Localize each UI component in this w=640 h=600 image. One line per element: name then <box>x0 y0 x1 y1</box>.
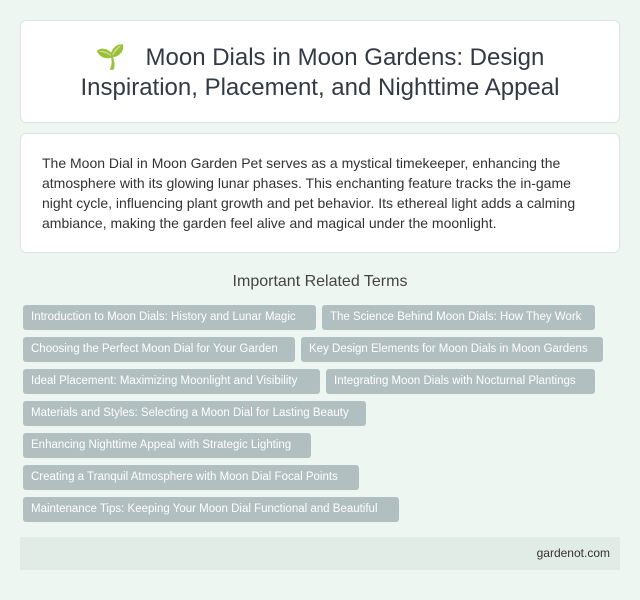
tag 3: Choosing the Perfect Moon Dial for Your Garden <box>31 343 278 355</box>
footer <box>20 537 620 570</box>
tag 8: Enhancing Nighttime Appeal with Strategic Lighting <box>31 439 291 451</box>
tag 6: Integrating Moon Dials with Nocturnal Plantings <box>334 375 576 387</box>
tag 7 <box>23 401 366 426</box>
tag 3 <box>23 337 295 362</box>
tag 4: Key Design Elements for Moon Dials in Moon Gardens <box>309 343 588 355</box>
title <box>81 44 559 101</box>
tag 9 <box>23 465 359 490</box>
title: 🌱 Moon Dials in Moon Gardens: Design <box>96 44 544 71</box>
title card <box>20 20 620 123</box>
tag 7: Materials and Styles: Selecting a Moon Dial for Lasting Beauty <box>31 407 349 419</box>
tag 6 <box>326 369 595 394</box>
tag 9: Creating a Tranquil Atmosphere with Moon Dial Focal Points <box>31 471 338 483</box>
tag 2: The Science Behind Moon Dials: How They Work <box>330 311 581 323</box>
section heading: Important Related Terms <box>233 273 407 290</box>
title: Inspiration, Placement, and Nighttime Appeal <box>81 74 559 101</box>
tag 10: Maintenance Tips: Keeping Your Moon Dial Functional and Beautiful <box>31 503 378 515</box>
tag 1: Introduction to Moon Dials: History and Lunar Magic <box>31 311 296 323</box>
tag 4 <box>301 337 603 362</box>
tag 5: Ideal Placement: Maximizing Moonlight and Visibility <box>31 375 297 387</box>
tag 8 <box>23 433 311 458</box>
description card <box>20 133 620 253</box>
footer source: gardenot.com <box>537 546 610 560</box>
description text: The Moon Dial in Moon Garden Pet serves as a mystical timekeeper, enhancing the atmosphere with its glowing lunar phases. This enchanting feature tracks the in-game night cycle, influencing plant growth and pet behavior. Its ethereal light adds a calming ambiance, making the garden feel alive and magical under the moonlight. <box>42 155 575 231</box>
tag 10 <box>23 497 399 522</box>
tag 2 <box>322 305 595 330</box>
tag 1 <box>23 305 316 330</box>
tag 5 <box>23 369 320 394</box>
